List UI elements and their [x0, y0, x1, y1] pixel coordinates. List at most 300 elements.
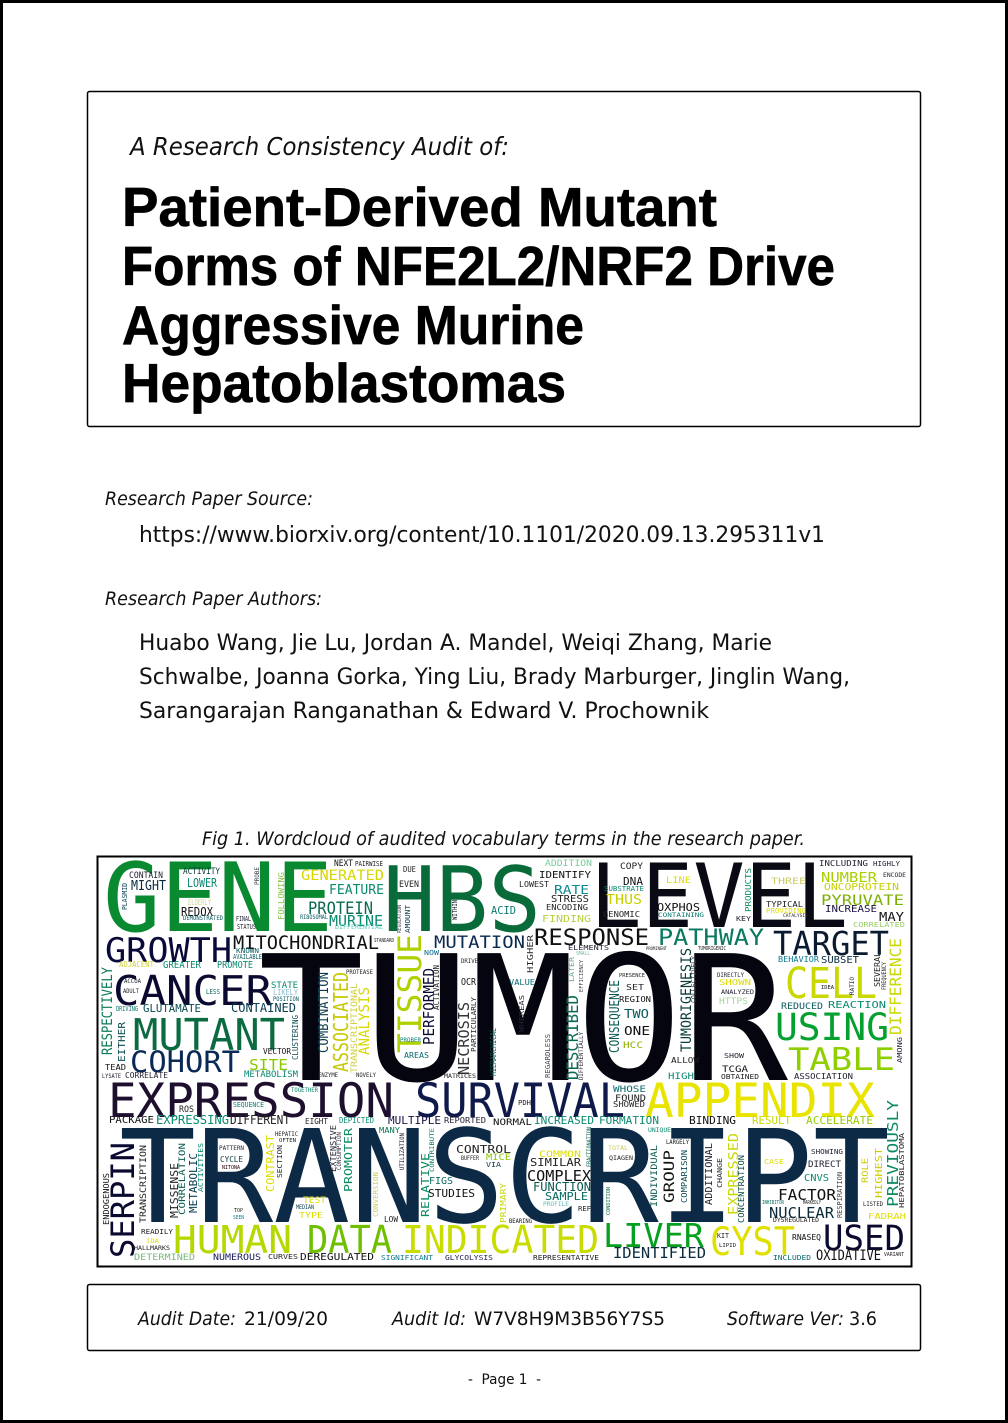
remaining vocabulary terms: ACTIVITIES — [197, 1143, 205, 1192]
remaining vocabulary terms: EXPRESSED — [727, 1133, 742, 1215]
remaining vocabulary terms: INDIVIDUAL — [650, 1145, 660, 1207]
remaining vocabulary terms: ENZYME — [318, 1072, 338, 1079]
remaining vocabulary terms: LARGELY — [666, 1139, 689, 1146]
remaining vocabulary terms: TABLE — [788, 1042, 895, 1078]
remaining vocabulary terms: TOP — [234, 1208, 243, 1214]
remaining vocabulary terms: DESCRIBED — [563, 995, 582, 1080]
remaining vocabulary terms: STUDIES — [428, 1187, 475, 1200]
remaining vocabulary terms: TEAD — [105, 1063, 126, 1072]
remaining vocabulary terms: NECROSIS — [455, 1002, 473, 1075]
remaining vocabulary terms: ACCELERATE — [806, 1114, 873, 1127]
remaining vocabulary terms: CONDITION — [606, 1187, 612, 1215]
remaining vocabulary terms: MATRICES — [444, 1073, 476, 1080]
remaining vocabulary terms: COHORT — [130, 1045, 240, 1079]
remaining vocabulary terms: COMPLEX — [527, 1167, 591, 1185]
remaining vocabulary terms: FREQUENCY — [881, 962, 888, 990]
remaining vocabulary terms: PROTEIN — [308, 899, 373, 919]
audit date: 21/09/20 — [244, 1308, 328, 1330]
remaining vocabulary terms: FOUND — [615, 1094, 646, 1104]
remaining vocabulary terms: VALUE — [509, 978, 535, 987]
word: EXPRESSION: EXPRESSION — [108, 1074, 394, 1129]
remaining vocabulary terms: PLASMID — [121, 883, 129, 910]
remaining vocabulary terms: DATA — [307, 1218, 392, 1262]
remaining vocabulary terms: KIT — [717, 1232, 730, 1240]
remaining vocabulary terms: POSITION — [273, 996, 299, 1003]
word: APPENDIX: APPENDIX — [645, 1074, 875, 1129]
remaining vocabulary terms: CONCENTRATION — [737, 1155, 746, 1223]
remaining vocabulary terms: GREATER — [163, 960, 202, 971]
remaining vocabulary terms: THREE — [771, 877, 806, 887]
remaining vocabulary terms: EXPRESSING — [156, 1113, 229, 1127]
remaining vocabulary terms: ACID — [491, 904, 516, 917]
remaining vocabulary terms: HIERARCHICAL — [489, 1028, 498, 1076]
remaining vocabulary terms: RATE — [554, 883, 589, 897]
remaining vocabulary terms: DIRECTLY — [717, 972, 744, 979]
remaining vocabulary terms: FUNCTION — [533, 1180, 591, 1194]
remaining vocabulary terms: OFTEN — [279, 1138, 296, 1144]
remaining vocabulary terms: SUBSET — [821, 955, 859, 966]
remaining vocabulary terms: WHEREAS — [518, 995, 526, 1032]
remaining vocabulary terms: IDENTIFIED — [613, 1244, 706, 1262]
remaining vocabulary terms: REDUCED — [781, 1002, 823, 1012]
remaining vocabulary terms: RESULT — [752, 1114, 791, 1127]
remaining vocabulary terms: USED — [823, 1219, 905, 1259]
source url: https://www.biorxiv.org/content/10.1101/2020.09.13.295311v1 — [139, 523, 825, 548]
remaining vocabulary terms: DEPICTED — [339, 1116, 374, 1125]
remaining vocabulary terms: DIFFERENTIAL — [335, 924, 383, 931]
remaining vocabulary terms: NITONA — [222, 1165, 240, 1171]
remaining vocabulary terms: DYSREGULATED — [773, 1217, 819, 1224]
remaining vocabulary terms: SERPIN — [104, 1142, 142, 1258]
remaining vocabulary terms: SHOWN — [719, 978, 751, 987]
remaining vocabulary terms: NOW — [424, 949, 440, 957]
remaining vocabulary terms: STATUS — [237, 923, 256, 931]
remaining vocabulary terms: TEST — [303, 1196, 327, 1206]
remaining vocabulary terms: CONTAINED — [231, 1001, 296, 1015]
remaining vocabulary terms: DIFFERENT — [230, 1113, 290, 1127]
remaining vocabulary terms: INCREASED — [534, 1114, 594, 1127]
remaining vocabulary terms: PROFILE — [543, 1201, 569, 1208]
software version: Software Ver: — [727, 1308, 844, 1330]
authors list — [139, 631, 850, 724]
remaining vocabulary terms: LOWEST — [519, 880, 549, 889]
remaining vocabulary terms: TRANSCRIPTION — [139, 1145, 149, 1223]
remaining vocabulary terms: REGARDLESS — [544, 1034, 552, 1078]
remaining vocabulary terms: LESS — [206, 988, 220, 996]
remaining vocabulary terms: GENOMIC — [603, 910, 640, 919]
remaining vocabulary terms: ADULT — [123, 988, 139, 995]
figure caption: Fig 1. Wordcloud of audited vocabulary terms in the research paper. — [202, 828, 805, 850]
remaining vocabulary terms: PROBE — [254, 867, 261, 885]
remaining vocabulary terms: HCC — [623, 1041, 643, 1051]
remaining vocabulary terms: DEMONSTRATED — [183, 915, 223, 922]
remaining vocabulary terms: CHANGE — [716, 1158, 724, 1188]
remaining vocabulary terms: METABOLISM — [244, 1070, 299, 1080]
remaining vocabulary terms: METABOLIC — [187, 1153, 200, 1213]
remaining vocabulary terms: LYSATE — [102, 1073, 121, 1080]
remaining vocabulary terms: TRANSCRIPTIONAL — [350, 983, 360, 1073]
remaining vocabulary terms: FADRAH — [868, 1212, 906, 1221]
remaining vocabulary terms: BUFFER — [461, 1155, 479, 1162]
remaining vocabulary terms: USING — [775, 1006, 889, 1049]
remaining vocabulary terms: REGULATION — [397, 905, 403, 933]
remaining vocabulary terms: NORMAL — [493, 1118, 532, 1128]
remaining vocabulary terms: NUMEROUS — [213, 1253, 261, 1263]
remaining vocabulary terms: CONTRAST — [264, 1135, 277, 1192]
remaining vocabulary terms: ENDOGENOUS — [102, 1173, 111, 1225]
remaining vocabulary terms: LOWER — [187, 876, 218, 890]
remaining vocabulary terms: MIGHT — [131, 879, 166, 894]
remaining vocabulary terms: FEATURE — [329, 883, 384, 898]
remaining vocabulary terms: REDOX — [181, 905, 214, 919]
remaining vocabulary terms: TCGA — [722, 1065, 749, 1075]
remaining vocabulary terms: IDA — [146, 1238, 159, 1245]
remaining vocabulary terms: IDEA — [821, 985, 834, 991]
remaining vocabulary terms: MITOCHONDRIAL — [233, 932, 379, 954]
remaining vocabulary terms: FACTOR — [778, 1186, 837, 1204]
remaining vocabulary terms: UTILIZATION — [399, 1133, 406, 1170]
remaining vocabulary terms: CONTAIN — [129, 871, 163, 881]
authors label: Research Paper Authors: — [105, 588, 322, 610]
remaining vocabulary terms: PYRUVATE — [821, 893, 904, 909]
remaining vocabulary terms: CNVS — [804, 1173, 829, 1184]
remaining vocabulary terms: CONVERSION — [372, 1172, 380, 1217]
title — [122, 176, 835, 414]
remaining vocabulary terms: LIPID — [719, 1243, 736, 1249]
remaining vocabulary terms: PROMOTER — [342, 1128, 355, 1192]
remaining vocabulary terms: HTTPS — [719, 997, 748, 1007]
remaining vocabulary terms: EIGHT — [305, 1117, 328, 1126]
remaining vocabulary terms: KEY — [736, 915, 752, 923]
remaining vocabulary terms: ENCODE — [883, 872, 906, 879]
remaining vocabulary terms: INHIBITOR — [762, 1200, 785, 1206]
remaining vocabulary terms: ONCOPROTEIN — [824, 882, 899, 893]
remaining vocabulary terms: CONSUMPTION — [336, 1132, 343, 1170]
remaining vocabulary terms: TUMORIGENESIS — [679, 948, 695, 1052]
remaining vocabulary terms: DIRECT — [808, 1160, 842, 1170]
title: Patient-Derived Mutant — [122, 176, 717, 238]
remaining vocabulary terms: OBTAINED — [721, 1073, 759, 1081]
remaining vocabulary terms: PACKAGE — [109, 1115, 154, 1126]
remaining vocabulary terms: DIFFERENCE — [886, 938, 905, 1035]
remaining vocabulary terms: PAIRWISE — [355, 860, 383, 868]
remaining vocabulary terms: MUTANT — [133, 1010, 285, 1061]
remaining vocabulary terms: MICE — [486, 1153, 511, 1163]
source label: Research Paper Source: — [105, 488, 313, 510]
remaining vocabulary terms: STATE — [271, 981, 298, 991]
remaining vocabulary terms: MEDIAN — [296, 1204, 314, 1211]
remaining vocabulary terms: AMONG — [896, 1037, 904, 1063]
remaining vocabulary terms: FIGS — [429, 1176, 453, 1187]
remaining vocabulary terms: GROUP — [662, 1150, 678, 1203]
remaining vocabulary terms: MANY — [379, 1126, 400, 1135]
remaining vocabulary terms: DIFFERENTIALLY — [578, 1032, 585, 1080]
title: Hepatoblastomas — [122, 352, 566, 414]
remaining vocabulary terms: HIGHEST — [874, 1148, 885, 1198]
remaining vocabulary terms: HEPATIC — [275, 1131, 298, 1138]
remaining vocabulary terms: INCLUDING — [819, 859, 868, 868]
remaining vocabulary terms: DRIVE — [461, 958, 478, 965]
remaining vocabulary terms: SAMPLE — [545, 1190, 588, 1203]
remaining vocabulary terms: NEXT — [334, 859, 353, 869]
remaining vocabulary terms: VIA — [486, 1161, 502, 1169]
remaining vocabulary terms: PDH — [518, 1099, 531, 1107]
remaining vocabulary terms: CORRELATE — [125, 1071, 168, 1080]
remaining vocabulary terms: ADDITIONAL — [704, 1143, 715, 1205]
title: Aggressive Murine — [122, 294, 584, 356]
remaining vocabulary terms: ACTIVITY — [183, 867, 220, 877]
remaining vocabulary terms: ANALYZED — [721, 989, 754, 996]
remaining vocabulary terms: BINDING — [689, 1114, 736, 1127]
remaining vocabulary terms: COMPARISON — [680, 1150, 689, 1203]
remaining vocabulary terms: PROTEASE — [346, 969, 373, 976]
remaining vocabulary terms: VARIANT — [884, 1252, 904, 1258]
remaining vocabulary terms: CORRELATION — [178, 1143, 188, 1215]
remaining vocabulary terms: SHOW — [724, 1052, 745, 1060]
remaining vocabulary terms: UNIQUE — [648, 1127, 671, 1134]
remaining vocabulary terms: MULTIPLE — [388, 1114, 441, 1127]
remaining vocabulary terms: REPORTED — [444, 1116, 486, 1125]
remaining vocabulary terms: ROLE — [861, 1158, 871, 1183]
remaining vocabulary terms: RESPIRATION — [836, 1172, 844, 1218]
remaining vocabulary terms: SHOWED — [613, 1100, 645, 1109]
remaining vocabulary terms: GLYCOLYSIS — [445, 1254, 493, 1262]
remaining vocabulary terms: ONE — [624, 1024, 650, 1038]
remaining vocabulary terms: ADDITION — [545, 859, 592, 869]
remaining vocabulary terms: CONSEQUENCE — [608, 980, 623, 1053]
remaining vocabulary terms: INDICATED — [402, 1218, 599, 1262]
remaining vocabulary terms: PARTICULARLY — [470, 996, 478, 1052]
subtitle: A Research Consistency Audit of: — [128, 132, 509, 161]
remaining vocabulary terms: GLUTAMATE — [143, 1002, 201, 1015]
panel: audit details footer — [88, 1284, 920, 1350]
remaining vocabulary terms: HIGHLY — [873, 860, 901, 868]
word: TRANSCRIPT: TRANSCRIPT — [119, 1103, 890, 1253]
word: SURVIVAL: SURVIVAL — [415, 1074, 625, 1129]
remaining vocabulary terms: CONTROL — [456, 1143, 511, 1156]
remaining vocabulary terms: DRIVING — [116, 1005, 138, 1013]
remaining vocabulary terms: MAY — [879, 910, 905, 924]
remaining vocabulary terms: SEQUENCE — [233, 1101, 264, 1109]
remaining vocabulary terms: ASSOCIATED — [329, 972, 353, 1072]
remaining vocabulary terms: BEHAVIOR — [778, 955, 819, 964]
remaining vocabulary terms: MUTATION — [434, 933, 525, 953]
remaining vocabulary terms: QIAGEN — [609, 1155, 633, 1162]
remaining vocabulary terms: TOGETHER — [291, 1087, 318, 1094]
word: HBS: HBS — [383, 848, 541, 953]
word: TUMOR: TUMOR — [258, 919, 788, 1122]
remaining vocabulary terms: TYPE — [299, 1211, 323, 1220]
remaining vocabulary terms: REF — [578, 1205, 591, 1213]
remaining vocabulary terms: LIVER — [603, 1216, 704, 1255]
remaining vocabulary terms: PRIMARY — [499, 1183, 508, 1223]
remaining vocabulary terms: RIBOSOMAL — [300, 914, 328, 921]
remaining vocabulary terms: ACTIVATION — [432, 965, 441, 1010]
remaining vocabulary terms: CONTAINING — [658, 912, 704, 919]
remaining vocabulary terms: SUBSTRATE — [604, 885, 644, 893]
remaining vocabulary terms: EFFICIENCY — [579, 960, 585, 992]
authors list: Huabo Wang, Jie Lu, Jordan A. Mandel, Weiqi Zhang, Marie — [139, 631, 772, 656]
remaining vocabulary terms: MARKEDLY — [803, 1200, 821, 1206]
remaining vocabulary terms: RATIO — [849, 977, 856, 995]
remaining vocabulary terms: VECTOR — [263, 1047, 291, 1056]
remaining vocabulary terms: FORMATION — [599, 1114, 659, 1127]
remaining vocabulary terms: GENERATED — [301, 868, 384, 884]
remaining vocabulary terms: READILY — [141, 1228, 174, 1236]
audit date: Audit Date: — [136, 1308, 236, 1330]
remaining vocabulary terms: PATTERN — [219, 1145, 244, 1152]
remaining vocabulary terms: MURINE — [329, 912, 383, 930]
remaining vocabulary terms: PRODUCTS — [744, 868, 753, 912]
title: Forms of NFE2L2/NRF2 Drive — [122, 235, 835, 297]
remaining vocabulary terms: LIKELY — [273, 988, 298, 997]
remaining vocabulary terms: OXIDATIVE — [816, 1248, 881, 1264]
remaining vocabulary terms: NOVELY — [356, 1072, 376, 1079]
remaining vocabulary terms: COMBINATION — [317, 972, 332, 1053]
remaining vocabulary terms: LATER — [568, 956, 576, 982]
remaining vocabulary terms: WHOSE — [613, 1085, 646, 1095]
remaining vocabulary terms: CURVES — [268, 1253, 298, 1261]
remaining vocabulary terms: PERFORMED — [420, 968, 438, 1045]
panel: title box — [88, 92, 920, 426]
remaining vocabulary terms: RESPECTIVELY — [100, 967, 116, 1055]
audit date — [136, 1308, 328, 1330]
remaining vocabulary terms: CASE — [764, 1158, 784, 1166]
remaining vocabulary terms: TYPICAL — [766, 900, 803, 909]
authors list: Schwalbe, Joanna Gorka, Ying Liu, Brady Marburger, Jinglin Wang, — [139, 665, 850, 690]
remaining vocabulary terms: DEREGULATED — [300, 1252, 374, 1263]
remaining vocabulary terms: IDENTIFY — [539, 870, 591, 881]
remaining vocabulary terms: PROVIDING — [766, 907, 806, 915]
remaining vocabulary terms: INCREASE — [825, 904, 877, 915]
remaining vocabulary terms: ENCODING — [546, 903, 588, 912]
remaining vocabulary terms: PATHWAY — [658, 926, 764, 951]
remaining vocabulary terms: ROS — [179, 1105, 194, 1115]
remaining vocabulary terms: CLUSTERING — [291, 1015, 300, 1060]
remaining vocabulary terms: RELATIVE — [419, 1153, 432, 1217]
remaining vocabulary terms: FINDING — [542, 914, 591, 925]
remaining vocabulary terms: HIGH — [668, 1072, 694, 1082]
remaining vocabulary terms: SMALL — [576, 951, 590, 957]
remaining vocabulary terms: ASSOCIATION — [794, 1072, 853, 1081]
remaining vocabulary terms: MISSENSE — [168, 1163, 181, 1218]
remaining vocabulary terms: SHOWING — [811, 1148, 843, 1156]
remaining vocabulary terms: PROMOTE — [217, 960, 253, 971]
remaining vocabulary terms: COPY — [620, 862, 644, 872]
remaining vocabulary terms: STANDARD — [374, 938, 394, 944]
remaining vocabulary terms: KNOWN — [236, 947, 259, 955]
remaining vocabulary terms: TARGET — [773, 924, 889, 963]
remaining vocabulary terms: STRESS — [551, 894, 589, 905]
remaining vocabulary terms: TUMORIGENIC — [698, 946, 726, 952]
remaining vocabulary terms: REGION — [619, 995, 651, 1004]
remaining vocabulary terms: SITE — [249, 1056, 288, 1074]
remaining vocabulary terms: AVAILABLE — [233, 953, 262, 961]
authors list: Sarangarajan Ranganathan & Edward V. Prochownik — [139, 699, 709, 724]
audit id — [390, 1308, 665, 1330]
remaining vocabulary terms: GROWTH — [105, 931, 232, 971]
page number: - Page 1 - — [468, 1372, 541, 1388]
remaining vocabulary terms: SET — [626, 983, 644, 992]
remaining vocabulary terms: HUMAN — [173, 1218, 292, 1262]
remaining vocabulary terms: SIGNIFICANT — [381, 1254, 434, 1262]
remaining vocabulary terms: DUE — [403, 865, 416, 874]
remaining vocabulary terms: REACTION — [828, 1000, 886, 1011]
remaining vocabulary terms: AREAS — [404, 1051, 429, 1060]
remaining vocabulary terms: CELL — [785, 959, 877, 1009]
remaining vocabulary terms: ADJACENT — [119, 960, 154, 969]
audit id: Audit Id: — [390, 1308, 466, 1330]
audit id: W7V8H9M3B56Y7S5 — [474, 1308, 665, 1330]
remaining vocabulary terms: EVEN — [399, 880, 419, 890]
remaining vocabulary terms: ACCOA — [124, 978, 141, 985]
remaining vocabulary terms: SEVERAL — [873, 952, 882, 987]
remaining vocabulary terms: FOLLOWING — [277, 872, 286, 920]
software version: 3.6 — [849, 1308, 877, 1330]
remaining vocabulary terms: WITHIN — [451, 900, 459, 920]
remaining vocabulary terms: LISTED — [863, 1201, 883, 1208]
remaining vocabulary terms: CORRELATED — [853, 921, 905, 929]
remaining vocabulary terms: FRACTIONATION — [586, 1127, 593, 1167]
remaining vocabulary terms: CYST — [710, 1220, 795, 1265]
remaining vocabulary terms — [100, 859, 906, 1265]
remaining vocabulary terms: NUMBER — [821, 871, 877, 886]
remaining vocabulary terms: OCR — [461, 977, 477, 988]
remaining vocabulary terms: SECTION — [276, 1145, 284, 1178]
remaining vocabulary terms: COLLECTIVELY — [690, 955, 698, 1003]
remaining vocabulary terms: ELDERLY — [188, 898, 211, 907]
remaining vocabulary terms: SEEN — [233, 1215, 244, 1221]
remaining vocabulary terms: OXPHOS — [657, 901, 700, 914]
remaining vocabulary terms: EXTENSIVE — [329, 1125, 338, 1172]
remaining vocabulary terms: EITHER — [117, 1021, 128, 1062]
remaining vocabulary terms: LOW — [384, 1215, 398, 1224]
remaining vocabulary terms: CONTRIBUTE — [429, 1128, 436, 1172]
remaining vocabulary terms: HIGHER — [526, 935, 535, 973]
remaining vocabulary terms: THUS — [606, 893, 642, 908]
remaining vocabulary terms: RESPONSE — [534, 926, 649, 951]
remaining vocabulary terms: CYCLE — [220, 1155, 243, 1164]
remaining vocabulary terms: PROMINENT — [646, 946, 668, 951]
remaining vocabulary terms: FINAL — [236, 915, 251, 923]
remaining vocabulary terms: COMMON — [539, 1150, 581, 1160]
remaining vocabulary terms: HEPATOBLASTOMA — [898, 1132, 906, 1208]
remaining vocabulary terms: AMOUNT — [404, 904, 412, 933]
remaining vocabulary terms: PREVIOUSLY — [884, 1100, 902, 1207]
word: GENE: GENE — [103, 844, 333, 954]
remaining vocabulary terms: INCLUDED — [773, 1254, 811, 1262]
remaining vocabulary terms: PRESENCE — [619, 973, 645, 979]
remaining vocabulary terms: ELEMENTS — [568, 944, 609, 952]
remaining vocabulary terms: TOTAL — [608, 1145, 628, 1152]
remaining vocabulary terms: RNASEQ — [792, 1233, 821, 1242]
remaining vocabulary terms: DNA — [623, 875, 643, 888]
chart: wordcloud — [98, 844, 912, 1266]
remaining vocabulary terms: DETERMINED — [134, 1253, 195, 1263]
remaining vocabulary terms: PROBER — [400, 1037, 421, 1044]
remaining vocabulary terms: BEARING — [509, 1218, 532, 1225]
remaining vocabulary terms: CANCER — [113, 967, 272, 1015]
remaining vocabulary terms: CATALYSIS — [783, 913, 809, 918]
remaining vocabulary terms: ALLOW — [671, 1056, 699, 1065]
remaining vocabulary terms: TWO — [624, 1007, 649, 1021]
remaining vocabulary terms: REPRESENTATIVE — [533, 1254, 599, 1262]
remaining vocabulary terms: HALLMARKS — [134, 1245, 170, 1252]
remaining vocabulary terms: SIMILAR — [530, 1156, 581, 1169]
remaining vocabulary terms: NUCLEAR — [769, 1204, 835, 1222]
remaining vocabulary terms: ANALYSIS — [357, 987, 373, 1055]
remaining vocabulary terms: LINE — [666, 876, 691, 886]
